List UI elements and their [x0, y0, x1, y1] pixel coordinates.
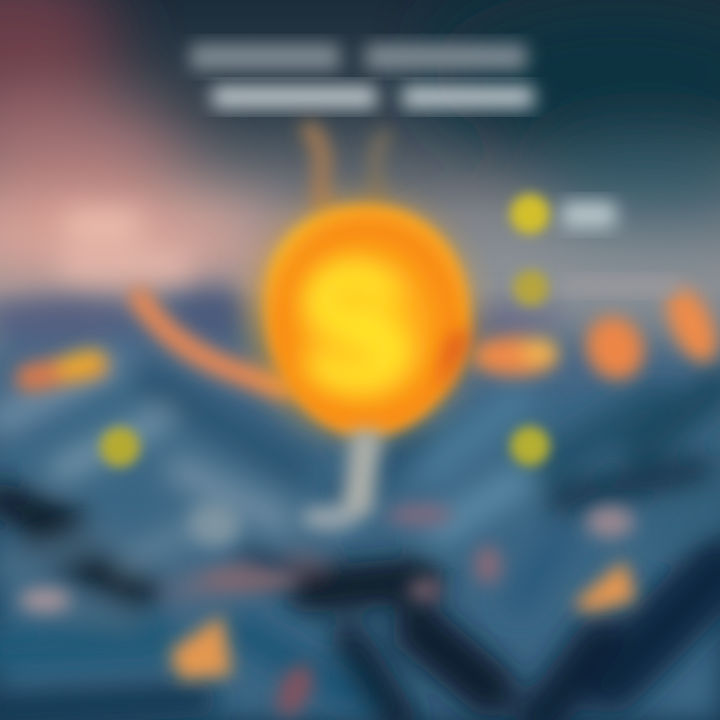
- title placeholder: first line: [190, 44, 527, 70]
- mountain range: [0, 286, 720, 720]
- icon: yellow marker middle right: [513, 270, 680, 306]
- smoke wisps above coin: [310, 130, 385, 210]
- coin rim shadow: [438, 325, 472, 395]
- icon: glowing dollar coin: [248, 198, 476, 438]
- orange flame ribbon, right: [471, 280, 720, 389]
- icon: yellow marker lower right: [510, 426, 550, 466]
- icon: yellow marker top right: [510, 194, 616, 234]
- muted highlights on lower ridges: [19, 503, 634, 612]
- coin stem: [300, 430, 382, 531]
- orange flame ribbon, left: [30, 298, 285, 388]
- diagonal ridge texture: [0, 365, 720, 720]
- left text placeholder: [60, 212, 190, 275]
- icon: yellow marker lower left: [100, 427, 140, 467]
- orange accent, bottom left: [170, 615, 320, 720]
- orange accent, bottom right: [572, 560, 636, 612]
- title placeholder: second line: [212, 86, 534, 108]
- dollar sign: [320, 276, 395, 377]
